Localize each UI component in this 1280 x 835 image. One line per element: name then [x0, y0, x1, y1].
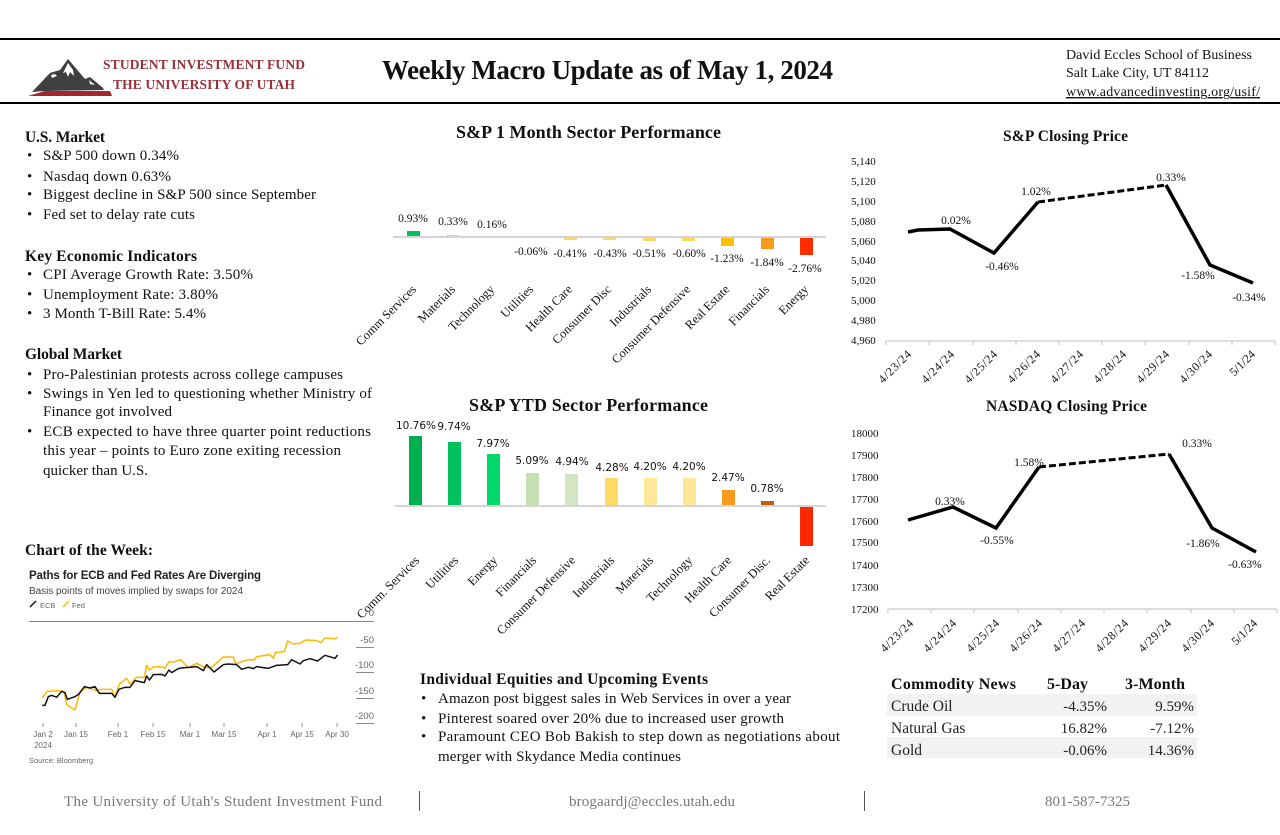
chart: ECB and Fed rate paths: Feb 15 — [141, 730, 166, 739]
chart: NASDAQ closing price: 0.33% — [1182, 438, 1212, 450]
table: commodity news: 3-Month — [1125, 676, 1185, 693]
footer: 801-587-7325 — [1045, 794, 1130, 810]
chart: ECB and Fed rate paths: Mar 15 — [212, 730, 237, 739]
chart: NASDAQ closing price: -1.86% — [1186, 538, 1220, 550]
chart: NASDAQ closing price: 17500 — [851, 537, 879, 549]
chart: S&P YTD sector performance: 4.28% — [595, 462, 629, 474]
table: commodity news — [887, 676, 1197, 759]
chart: S&P 1 month sector performance: -0.41% — [553, 248, 587, 260]
table: commodity news: -0.06% — [1063, 743, 1107, 759]
panel: individual equities and upcoming events: • — [421, 729, 426, 745]
chart: S&P 1 month sector performance: Comm Services — [353, 282, 419, 348]
chart: NASDAQ closing price — [851, 398, 1277, 655]
panel: global market: Global Market — [25, 346, 123, 363]
chart: S&P 1 month sector performance: -1.23% — [710, 253, 744, 265]
chart: ECB and Fed rate paths: 2024 — [34, 741, 52, 750]
chart: NASDAQ closing price: 4/29/24 — [1135, 616, 1174, 655]
chart: NASDAQ closing price: -0.55% — [980, 535, 1014, 547]
address block — [1066, 48, 1260, 100]
chart: NASDAQ closing price: 4/26/24 — [1006, 616, 1045, 655]
chart: S&P YTD sector performance: 2.47% — [711, 472, 745, 484]
panel: individual equities and upcoming events: Paramount CEO Bob Bakish to step down as negotiations about — [438, 729, 841, 745]
panel: global market: Finance got involved — [43, 404, 172, 420]
panel: key economic indicators: 3 Month T-Bill Rate: 5.4% — [43, 306, 206, 322]
chart: S&P 1 month sector performance: Technology — [446, 282, 498, 334]
chart: NASDAQ closing price: -0.63% — [1228, 559, 1262, 571]
chart: S&P 1 month sector performance: 0.33% — [438, 216, 468, 228]
chart: S&P closing price: 4/23/24 — [875, 347, 914, 386]
chart: S&P 1 month sector performance: -1.84% — [750, 257, 784, 269]
chart: ECB and Fed rate paths: Mar 1 — [180, 730, 201, 739]
chart: S&P closing price: 5,140 — [851, 156, 876, 168]
chart: ECB and Fed rate paths: Paths for ECB and Fed Rates Are Diverging — [29, 570, 261, 582]
chart: ECB and Fed rate paths: Apr 30 — [325, 730, 349, 739]
chart: S&P YTD sector performance: 10.76% — [396, 420, 436, 432]
chart: S&P closing price: 5,120 — [851, 176, 876, 188]
logo text: THE UNIVERSITY OF UTAH — [113, 77, 295, 92]
chart: NASDAQ closing price: 17300 — [851, 582, 879, 594]
logo text — [103, 57, 305, 92]
table: commodity news: 9.59% — [1155, 699, 1194, 715]
chart: S&P closing price: 5,080 — [851, 216, 876, 228]
panel: U.S. market: Fed set to delay rate cuts — [43, 207, 195, 223]
panel: global market: quicker than U.S. — [43, 463, 148, 479]
chart: NASDAQ closing price: 4/28/24 — [1092, 616, 1131, 655]
table: commodity news: 5-Day — [1047, 676, 1088, 693]
chart: NASDAQ closing price: 17200 — [851, 604, 879, 616]
chart: S&P 1 month sector performance: -0.43% — [593, 248, 627, 260]
panel: individual equities and upcoming events: • — [421, 691, 426, 707]
chart: S&P YTD sector performance: Health Care — [682, 553, 734, 606]
panel: global market: ECB expected to have three quarter point reductions — [43, 424, 371, 440]
chart: S&P 1 month sector performance: Real Estate — [682, 282, 732, 332]
chart: NASDAQ closing price: 4/23/24 — [877, 616, 916, 655]
chart: S&P YTD sector performance: Energy — [465, 553, 501, 588]
panel: U.S. market: • — [27, 148, 32, 164]
panel: individual equities and upcoming events — [420, 671, 841, 765]
chart: S&P YTD sector performance: Utilities — [423, 553, 461, 592]
chart: ECB and Fed rate paths: Basis points of moves implied by swaps for 2024 — [29, 586, 243, 597]
chart: S&P YTD sector performance: 7.97% — [476, 438, 510, 450]
chart: S&P YTD sector performance: Materials — [613, 553, 656, 597]
panel: global market: this year – points to Euro zone exiting recession — [43, 443, 342, 459]
table: commodity news: -4.35% — [1063, 699, 1107, 715]
address block: David Eccles School of Business — [1066, 48, 1252, 63]
chart: S&P closing price: -0.34% — [1232, 292, 1266, 304]
chart: NASDAQ closing price: 17600 — [851, 516, 879, 528]
panel: global market: Pro-Palestinian protests across college campuses — [43, 367, 343, 383]
chart: ECB and Fed rate paths: Fed — [72, 601, 85, 610]
chart: NASDAQ closing price: 4/27/24 — [1049, 616, 1088, 655]
chart: NASDAQ closing price: 0.33% — [935, 496, 965, 508]
chart: ECB and Fed rate paths: Jan 2 — [33, 730, 53, 739]
table: commodity news: Gold — [891, 742, 922, 759]
panel: global market: • — [27, 424, 32, 440]
panel: individual equities and upcoming events: • — [421, 711, 426, 727]
chart: ECB and Fed rate paths — [29, 570, 374, 765]
logo — [28, 57, 305, 96]
footer: The University of Utah's Student Investment Fund — [64, 794, 382, 810]
chart: ECB and Fed rate paths: ECB — [40, 601, 55, 610]
table: commodity news: Commodity News — [891, 676, 1016, 693]
chart: S&P closing price: 4/25/24 — [961, 347, 1000, 386]
chart: S&P YTD sector performance: Comm. Services — [354, 553, 422, 622]
panel: U.S. market: • — [27, 187, 32, 203]
panel: U.S. market: • — [27, 207, 32, 223]
chart: S&P 1 month sector performance: Utilities — [498, 282, 536, 321]
chart: ECB and Fed rate paths: Apr 15 — [290, 730, 314, 739]
chart: S&P YTD sector performance: Consumer Disc. — [706, 553, 773, 620]
chart: S&P YTD sector performance: Real Estate — [762, 553, 812, 603]
chart: S&P 1 month sector performance — [353, 122, 826, 367]
chart: S&P closing price: -1.58% — [1181, 270, 1215, 282]
chart: S&P YTD sector performance: 5.09% — [515, 455, 549, 467]
panel: U.S. market: S&P 500 down 0.34% — [43, 148, 179, 164]
chart: S&P closing price: 0.02% — [941, 215, 971, 227]
chart: S&P YTD sector performance: 4.20% — [633, 461, 667, 473]
chart: S&P closing price: 5,000 — [851, 295, 876, 307]
chart: S&P closing price: -0.46% — [985, 261, 1019, 273]
heading: chart of the week: Chart of the Week: — [25, 542, 153, 559]
footer: brogaardj@eccles.utah.edu — [569, 794, 736, 810]
table: commodity news: Crude Oil — [891, 698, 953, 715]
chart: S&P 1 month sector performance: Health Care — [523, 282, 575, 335]
chart: S&P 1 month sector performance: 0.93% — [398, 213, 428, 225]
chart: S&P 1 month sector performance: Consumer Defensive — [609, 282, 693, 367]
chart: S&P closing price: 5,060 — [851, 236, 876, 248]
table: commodity news: -7.12% — [1150, 721, 1194, 737]
chart: S&P closing price: 4/28/24 — [1090, 347, 1129, 386]
chart: ECB and Fed rate paths: -100 — [355, 660, 374, 671]
chart: S&P closing price: S&P Closing Price — [1003, 128, 1128, 145]
panel: U.S. market — [25, 129, 316, 223]
icon: mountain — [28, 59, 112, 96]
chart: NASDAQ closing price: 4/30/24 — [1178, 616, 1217, 655]
panel: U.S. market: Biggest decline in S&P 500 since September — [43, 187, 316, 203]
chart: S&P YTD sector performance: 0.78% — [750, 483, 784, 495]
address block: Salt Lake City, UT 84112 — [1066, 66, 1209, 81]
chart: S&P closing price: 4,980 — [851, 315, 876, 327]
chart: S&P closing price: 5,020 — [851, 275, 876, 287]
chart: S&P 1 month sector performance: Materials — [415, 282, 458, 326]
chart: NASDAQ closing price: 5/1/24 — [1229, 616, 1260, 648]
chart: NASDAQ closing price: 4/24/24 — [920, 616, 959, 655]
chart: ECB and Fed rate paths: -50 — [360, 635, 374, 646]
chart: NASDAQ closing price: 17400 — [851, 560, 879, 572]
chart: S&P closing price: 4/26/24 — [1004, 347, 1043, 386]
chart: S&P closing price: 4,960 — [851, 335, 876, 347]
panel: key economic indicators — [25, 248, 253, 322]
chart: S&P YTD sector performance: Financials — [493, 553, 539, 599]
header band — [0, 38, 1280, 104]
panel: individual equities and upcoming events: Amazon post biggest sales in Web Services in over a year — [438, 691, 791, 707]
panel: key economic indicators: • — [27, 267, 32, 283]
chart: S&P 1 month sector performance: -2.76% — [788, 263, 822, 275]
panel: individual equities and upcoming events: Pinterest soared over 20% due to increased user growth — [438, 711, 784, 727]
table: commodity news: 16.82% — [1061, 721, 1107, 737]
chart: ECB and Fed rate paths: -200 — [355, 711, 374, 722]
chart: S&P closing price: 1.02% — [1021, 186, 1051, 198]
panel: U.S. market: Nasdaq down 0.63% — [43, 169, 171, 185]
chart: S&P closing price: 5,040 — [851, 255, 876, 267]
panel: key economic indicators: • — [27, 287, 32, 303]
panel: global market: • — [27, 367, 32, 383]
panel: individual equities and upcoming events: merger with Skydance Media continues — [438, 749, 681, 765]
chart: ECB and Fed rate paths: Apr 1 — [257, 730, 277, 739]
chart: S&P 1 month sector performance: -0.06% — [514, 246, 548, 258]
chart: S&P 1 month sector performance: -0.60% — [672, 248, 706, 260]
chart: S&P closing price: 0.33% — [1156, 172, 1186, 184]
chart: S&P 1 month sector performance: 0.16% — [477, 219, 507, 231]
footer — [64, 791, 1130, 811]
chart: S&P 1 month sector performance: Industrials — [607, 282, 654, 329]
chart: NASDAQ closing price: 18000 — [851, 428, 879, 440]
panel: key economic indicators: Key Economic Indicators — [25, 248, 197, 265]
table: commodity news: 14.36% — [1148, 743, 1194, 759]
logo text: STUDENT INVESTMENT FUND — [103, 57, 305, 72]
chart: S&P 1 month sector performance: Consumer Disc — [549, 282, 614, 347]
chart: NASDAQ closing price: NASDAQ Closing Price — [986, 398, 1147, 415]
chart: S&P closing price — [851, 128, 1275, 386]
panel: global market — [25, 346, 372, 479]
chart: S&P YTD sector performance — [354, 395, 826, 638]
chart: NASDAQ closing price: 4/25/24 — [963, 616, 1002, 655]
chart: ECB and Fed rate paths: -150 — [355, 686, 374, 697]
chart: S&P YTD sector performance: Industrials — [570, 553, 617, 600]
panel: individual equities and upcoming events: Individual Equities and Upcoming Events — [420, 671, 708, 688]
table: commodity news: Natural Gas — [891, 720, 965, 737]
panel: U.S. market: • — [27, 169, 32, 185]
chart: S&P closing price: 4/27/24 — [1047, 347, 1086, 386]
panel: global market: • — [27, 386, 32, 402]
chart: S&P closing price: 5/1/24 — [1227, 347, 1258, 379]
chart: S&P closing price: 4/29/24 — [1133, 347, 1172, 386]
chart: S&P closing price: 4/30/24 — [1176, 347, 1215, 386]
chart: S&P 1 month sector performance: S&P 1 Month Sector Performance — [456, 122, 721, 142]
chart: S&P 1 month sector performance: -0.51% — [632, 248, 666, 260]
chart: NASDAQ closing price: 17800 — [851, 472, 879, 484]
chart: ECB and Fed rate paths: Feb 1 — [108, 730, 129, 739]
chart: S&P YTD sector performance: S&P YTD Sector Performance — [469, 395, 708, 415]
chart: ECB and Fed rate paths: 0 — [369, 608, 374, 619]
panel: global market: Swings in Yen led to questioning whether Ministry of — [43, 386, 372, 402]
chart: S&P YTD sector performance: Consumer Defensive — [494, 553, 578, 638]
chart: NASDAQ closing price: 17900 — [851, 450, 879, 462]
chart: S&P YTD sector performance: 4.20% — [672, 461, 706, 473]
chart: S&P 1 month sector performance: Financials — [726, 282, 772, 328]
chart: S&P closing price: 5,100 — [851, 196, 876, 208]
chart: ECB and Fed rate paths: Jan 15 — [64, 730, 89, 739]
title: Weekly Macro Update as of May 1, 2024 — [382, 55, 833, 85]
chart: S&P YTD sector performance: Technology — [644, 553, 696, 605]
panel: U.S. market: U.S. Market — [25, 129, 106, 146]
chart: S&P closing price: 4/24/24 — [918, 347, 957, 386]
panel: key economic indicators: Unemployment Rate: 3.80% — [43, 287, 218, 303]
panel: key economic indicators: • — [27, 306, 32, 322]
panel: key economic indicators: CPI Average Growth Rate: 3.50% — [43, 267, 253, 283]
chart: ECB and Fed rate paths: Source: Bloomberg — [29, 756, 93, 765]
chart: S&P YTD sector performance: 4.94% — [555, 456, 589, 468]
chart: NASDAQ closing price: 17700 — [851, 494, 879, 506]
chart: NASDAQ closing price: 1.58% — [1014, 457, 1044, 469]
address block: www.advancedinvesting.org/usif/ — [1066, 85, 1260, 100]
chart: S&P YTD sector performance: 9.74% — [437, 421, 471, 433]
chart: S&P 1 month sector performance: Energy — [776, 282, 812, 317]
